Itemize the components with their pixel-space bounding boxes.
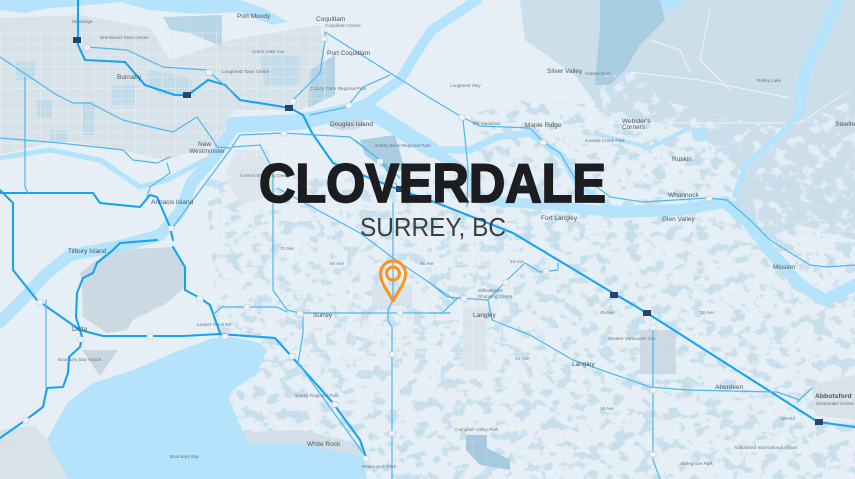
minor labels: Coquitlam Centre — [325, 23, 361, 28]
minor labels: Abbotsford International Airport — [734, 445, 798, 450]
King George Boulevard — [298, 317, 363, 453]
major place names: Port Moody — [237, 13, 271, 20]
farmland blotches — [206, 100, 855, 479]
minor labels: Lougheed Hwy — [450, 83, 481, 88]
Highway 10 — [215, 307, 287, 313]
major place names: Fort Langley — [541, 215, 578, 222]
major place names: Langley — [572, 361, 596, 368]
Colony Farm park — [308, 55, 335, 108]
minor labels: 56 Ave — [420, 261, 434, 266]
interchange markers — [73, 37, 823, 425]
major place names: Abbotsford — [815, 393, 852, 400]
minor labels: 72 Ave — [280, 246, 294, 251]
major place names: Langley — [473, 312, 497, 319]
urban area: south delta — [0, 425, 68, 479]
urban parks in Burnaby — [16, 55, 300, 142]
Fraser River main channel — [233, 112, 432, 150]
Burrard Inlet — [0, 0, 288, 25]
Highway west spur — [0, 190, 80, 330]
hill clearings — [600, 72, 855, 236]
minor labels: Lougheed Town Centre — [222, 69, 270, 74]
Fraser lower channel — [432, 150, 617, 213]
major place names: Maple Ridge — [525, 122, 562, 129]
minor labels: Westridge — [72, 19, 93, 24]
Tilbury vertical — [25, 77, 28, 193]
Stave River — [735, 107, 803, 195]
major place names: Port Coquitlam — [327, 50, 370, 57]
minor labels: Peace Arch Park — [362, 464, 397, 469]
Lougheed north — [0, 138, 170, 163]
major place names: Coquitlam — [316, 16, 345, 23]
major place names: White Rock — [307, 441, 341, 448]
urban area: White Rock — [245, 430, 365, 458]
Abbotsford urban — [812, 375, 855, 420]
Boundary Bay — [47, 337, 367, 479]
Surrey Bend park — [360, 135, 405, 172]
Lake — [692, 128, 708, 142]
Highway 91 — [173, 247, 220, 333]
Douglas Island — [328, 116, 364, 130]
Fraser River north arm — [0, 150, 205, 187]
minor labels: Shopping Centre — [478, 294, 513, 299]
Golden Ears link — [463, 120, 468, 207]
Scott Road link — [233, 145, 450, 313]
major place names: Silver Valley — [547, 68, 583, 75]
urban area: Langley — [463, 307, 487, 370]
minor labels: 32 Ave — [700, 310, 714, 315]
forest park — [595, 0, 665, 85]
Tilbury branch — [45, 300, 47, 387]
Fraser Highway east — [430, 283, 462, 298]
Harrison Lake arm — [800, 0, 838, 100]
Highway 1 — [78, 0, 818, 422]
major place names: Surrey — [313, 312, 333, 319]
Highway 1 Abbotsford — [818, 422, 855, 427]
Kingsway — [0, 57, 230, 148]
Fraser east channel — [610, 202, 855, 300]
Highway 10 Langley — [488, 300, 800, 400]
major place names: Annacis Island — [151, 199, 194, 206]
Annacis link — [147, 163, 170, 197]
major place names: New — [198, 141, 211, 148]
152 Street diagonal — [355, 140, 400, 178]
minor labels: Como Lake Ave — [252, 49, 285, 54]
major place names: Tilbury Island — [68, 248, 107, 255]
major place names: Westminster — [189, 148, 226, 155]
Pitt River — [330, 0, 477, 118]
Port Coquitlam branch — [310, 75, 390, 115]
minor labels: Sevenoaks Centre — [816, 401, 854, 406]
minor labels: Central Shopping Centre — [240, 173, 291, 178]
Fraser River south arm — [0, 126, 235, 322]
major place names: Glen Valley — [662, 216, 696, 223]
minor labels: Vye Rd — [780, 416, 795, 421]
minor labels: 24 Ave — [515, 356, 529, 361]
major place names: Douglas Island — [330, 121, 373, 128]
icon: orange location pin — [380, 261, 406, 301]
minor labels: Kanaka Creek Park — [585, 138, 626, 143]
Lougheed east — [293, 32, 430, 100]
minor labels: Surrey Bend Regional Park — [375, 143, 431, 148]
urban area: Surrey — [225, 150, 275, 205]
minor labels: Greater Vancouver Zoo — [608, 336, 656, 341]
Highway 99 — [80, 330, 367, 460]
urban area: Burnaby — [0, 15, 330, 160]
title: CLOVERDALE — [259, 152, 606, 214]
minor labels: Boundary Bay — [170, 454, 200, 459]
major place names: Burnaby — [117, 74, 142, 81]
minor labels: Golden Ears — [585, 71, 611, 76]
Highway west link — [0, 193, 173, 240]
minor labels: Rolley Lake — [757, 78, 781, 83]
Greater Vancouver Zoo lands — [640, 330, 676, 374]
route shields — [23, 36, 712, 461]
Alex Fraser corridor — [173, 133, 400, 227]
Highway 11 north — [797, 388, 812, 402]
Lake north — [660, 0, 685, 14]
minor labels: Campbell Valley Park — [455, 427, 499, 432]
rural roads — [590, 10, 850, 123]
Highway 7 — [430, 98, 770, 240]
Burke Mountain park — [163, 15, 222, 47]
minor labels: 40 Ave — [600, 310, 614, 315]
minor labels: Brentwood Town Centre — [100, 35, 149, 40]
minor labels: 16 Ave — [600, 406, 614, 411]
Campbell Valley park — [466, 435, 510, 470]
street grid — [0, 30, 330, 160]
Fraser upper channel — [432, 133, 617, 213]
minor labels: 64 Ave — [330, 261, 344, 266]
minor labels: Pitt Meadows — [473, 121, 501, 126]
major place names: Ruskin — [672, 156, 692, 163]
minor labels: Aldergrove Park — [680, 461, 714, 466]
street grid south — [190, 175, 520, 375]
Highway 1A Langley — [430, 263, 558, 313]
bog — [80, 247, 185, 333]
Boundary Bay Airport — [82, 350, 118, 376]
major place names: Webster's — [622, 118, 651, 125]
mountain terrain — [520, 0, 855, 240]
minor labels: Colony Farm Regional Park — [310, 86, 367, 91]
Alouette River — [600, 130, 685, 148]
major place names: Whonnock — [668, 192, 699, 199]
Highway 15 — [388, 203, 393, 479]
Fraser Highway — [277, 188, 455, 300]
264 St — [653, 327, 660, 479]
Highway 10 west — [0, 240, 157, 438]
major place names: Mission — [773, 264, 795, 271]
subtitle: SURREY, BC — [360, 212, 506, 242]
major place names: Corners — [622, 124, 646, 131]
Barnet road — [87, 47, 233, 93]
Mission road — [770, 240, 855, 267]
street grid east — [430, 220, 855, 479]
major place names: Aberdeen — [715, 384, 744, 391]
minor labels: 48 Ave — [510, 259, 524, 264]
minor labels: Ladner Trunk Rd — [197, 322, 232, 327]
major place names: Delta — [72, 326, 88, 333]
minor labels: Boundary Bay Airport — [58, 357, 102, 362]
minor labels: Willowbrook — [478, 288, 503, 293]
urban area: Cloverdale — [372, 285, 412, 306]
minor labels: Surrey Regional Park — [295, 393, 339, 398]
